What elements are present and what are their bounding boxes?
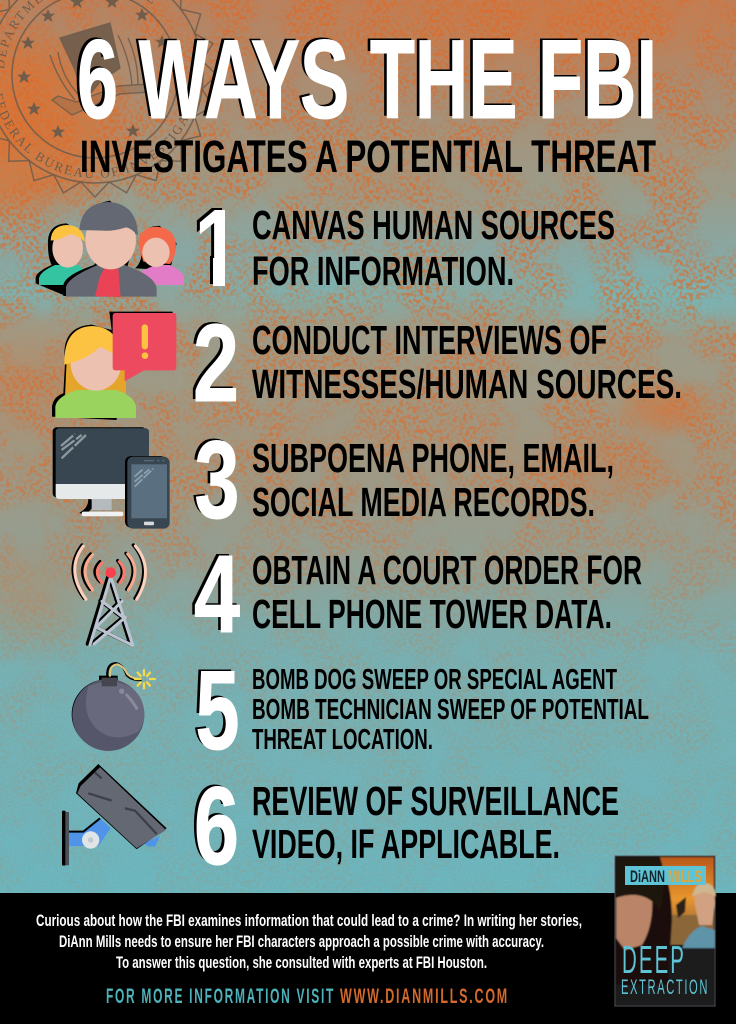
- footer description: To answer this question, she consulted with experts at FBI Houston.: [116, 953, 487, 972]
- step 1 text: [252, 202, 615, 294]
- number 6: 6: [191, 763, 236, 886]
- website call to action: WWW.DIANMILLS.COM: [340, 985, 509, 1008]
- step 1 text: FOR INFORMATION.: [252, 248, 514, 294]
- step 3 text: [252, 435, 614, 525]
- step 2: [52, 300, 682, 425]
- cover author banner: MILLS: [668, 867, 702, 886]
- icon: three people: [36, 201, 184, 297]
- step 1: [36, 200, 614, 297]
- icon: monitor and smartphone: [53, 427, 170, 529]
- step 2 text: [252, 317, 682, 407]
- icon: woman with alert speech bubble: [52, 312, 176, 420]
- number 1: 1: [191, 185, 239, 308]
- icon: surveillance camera: [62, 764, 167, 866]
- step 5 text: THREAT LOCATION.: [252, 724, 433, 756]
- book cover: [615, 856, 716, 1006]
- step 3: [53, 417, 614, 542]
- FBI seal watermark: [0, 0, 214, 198]
- step 5 text: [252, 664, 649, 756]
- footer description: [36, 911, 582, 972]
- seal shield and laurels: [50, 23, 150, 115]
- number 3: 3: [192, 417, 236, 540]
- website call to action: FOR MORE INFORMATION VISIT: [106, 985, 335, 1008]
- number 4: 4: [194, 533, 240, 656]
- number 1: 1: [194, 187, 242, 310]
- number 2: 2: [193, 302, 239, 425]
- icon: bomb: [72, 663, 155, 751]
- number 1: [196, 208, 225, 286]
- number 3: 3: [194, 419, 240, 542]
- step 5: [72, 646, 649, 773]
- number 5: 5: [192, 646, 236, 771]
- step 6 text: VIDEO, IF APPLICABLE.: [252, 821, 560, 867]
- step 4: [73, 531, 642, 656]
- cover title: [621, 939, 709, 999]
- icon: cell tower: [73, 545, 145, 645]
- number 4: 4: [191, 531, 237, 654]
- number 6: 6: [194, 765, 239, 888]
- step 6 text: [252, 778, 619, 867]
- seal lettering: [0, 0, 188, 178]
- number 2: 2: [190, 300, 236, 423]
- cover author banner: [625, 866, 706, 886]
- number 5: 5: [196, 648, 240, 773]
- cover author banner: DiANN: [630, 867, 665, 886]
- step 6: [62, 763, 619, 888]
- footer band: [0, 893, 736, 1024]
- step 4 text: [252, 547, 642, 637]
